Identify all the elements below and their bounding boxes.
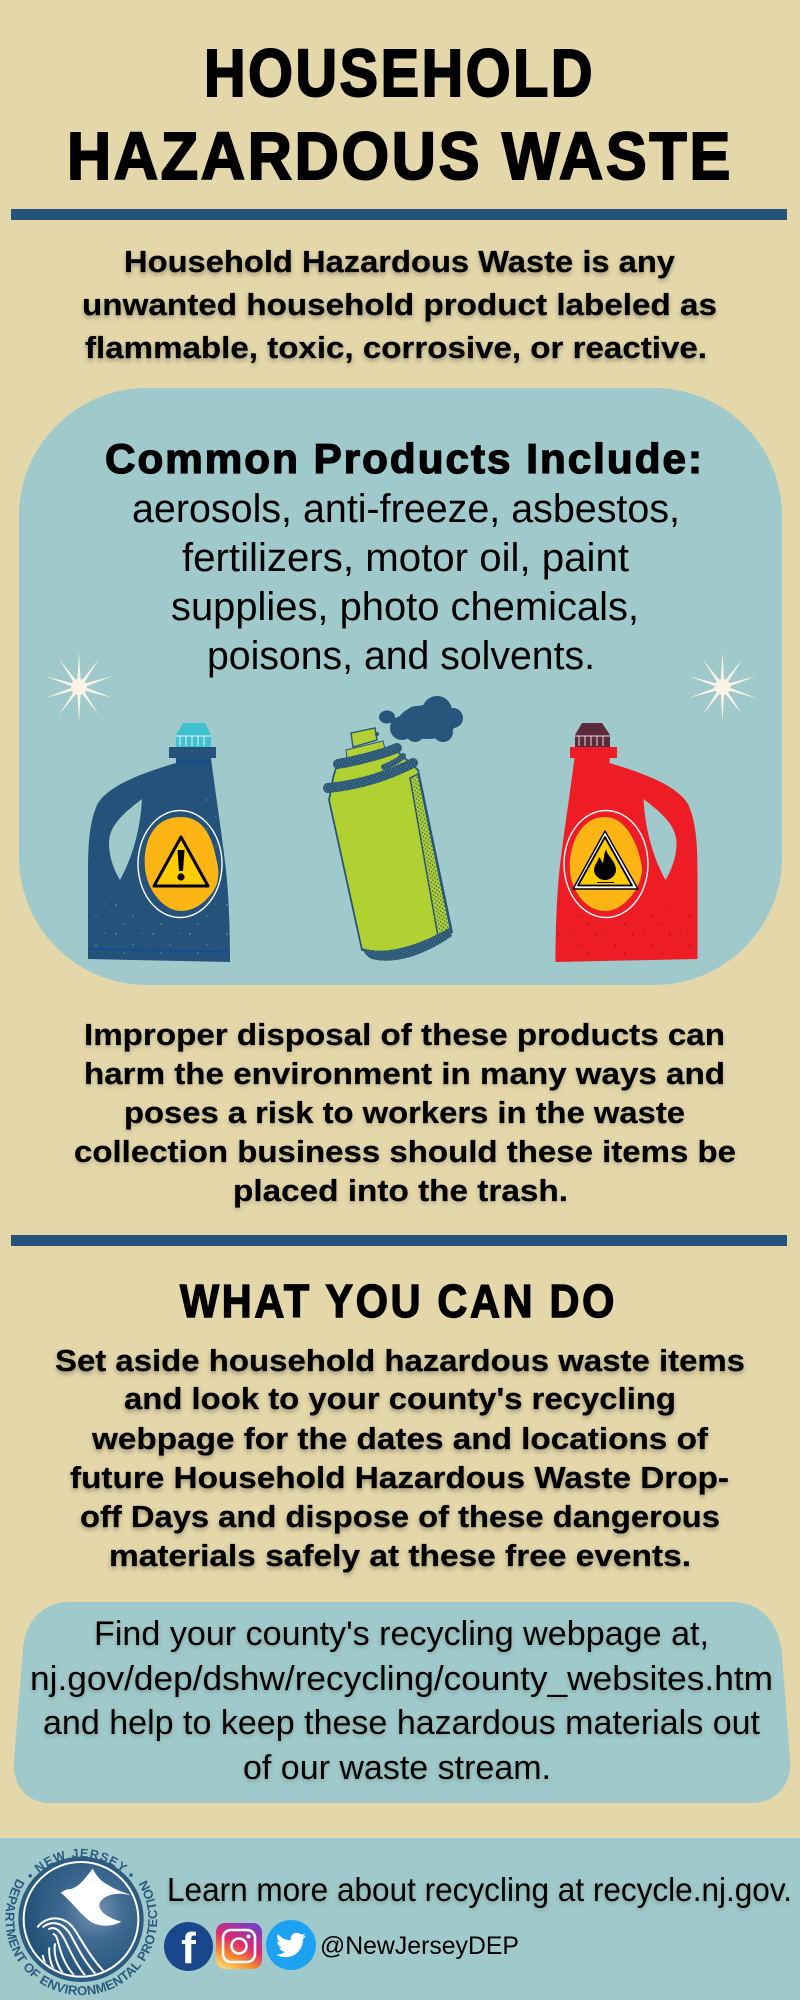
action text: off Days and dispose of these dangerous <box>80 1499 720 1534</box>
panel heading: Common Products Include: <box>105 435 704 482</box>
panel: county webpage <box>14 1602 790 1803</box>
footer band <box>0 1838 800 2000</box>
panel text <box>30 1615 773 1787</box>
icon: right sparkle <box>688 652 756 722</box>
action text: future Household Hazardous Waste Drop- <box>70 1460 729 1495</box>
disposal warning text: harm the environment in many ways and <box>84 1056 725 1091</box>
disposal warning text: placed into the trash. <box>233 1173 568 1208</box>
product list <box>132 487 680 678</box>
icon: twitter <box>266 1920 316 1970</box>
icon: facebook: f <box>181 1924 196 1973</box>
panel text: Find your county's recycling webpage at, <box>94 1615 709 1653</box>
icon: spray cloud <box>379 696 463 742</box>
panel text: and help to keep these hazardous materials out <box>43 1704 761 1742</box>
disposal warning text: Improper disposal of these products can <box>84 1017 725 1052</box>
title: HAZARDOUS WASTE <box>67 119 733 194</box>
icon: NJDEP seal: • NEW JERSEY • <box>28 1848 133 1878</box>
product list: fertilizers, motor oil, paint <box>182 536 629 580</box>
panel text: of our waste stream. <box>243 1749 551 1787</box>
action text: webpage for the dates and locations of <box>91 1421 709 1456</box>
panel background <box>14 1602 790 1803</box>
intro text: flammable, toxic, corrosive, or reactive. <box>85 330 707 365</box>
icon: instagram <box>216 1923 262 1969</box>
action text: and look to your county's recycling <box>124 1381 676 1416</box>
panel background <box>19 388 782 985</box>
product list: poisons, and solvents. <box>207 634 595 678</box>
icon: facebook <box>164 1922 213 1973</box>
section heading: what you can do: WHAT YOU CAN DO <box>180 1275 617 1327</box>
disposal warning text: poses a risk to workers in the waste <box>124 1095 685 1130</box>
panel text: nj.gov/dep/dshw/recycling/county_websites.htm <box>30 1660 773 1698</box>
icon: aerosol can <box>328 728 452 961</box>
action text: Set aside household hazardous waste items <box>55 1343 745 1378</box>
intro text: unwanted household product labeled as <box>82 287 717 322</box>
action text: materials safely at these free events. <box>109 1538 691 1573</box>
social handle: @NewJerseyDEP <box>320 1932 519 1960</box>
icon: red flammable bottle <box>556 723 698 962</box>
action text <box>55 1343 745 1573</box>
product list: aerosols, anti-freeze, asbestos, <box>132 487 680 531</box>
title <box>67 36 733 194</box>
panel: common products <box>19 388 782 985</box>
icon: blue warning bottle <box>88 723 230 962</box>
product list: supplies, photo chemicals, <box>171 585 639 629</box>
icon: left sparkle <box>45 652 113 722</box>
disposal warning text <box>74 1017 736 1208</box>
intro text <box>82 244 717 365</box>
footer background <box>0 1838 800 2000</box>
icon: NJDEP seal: DEPARTMENT OF ENVIRONMENTAL PROTECTION <box>5 1878 158 1996</box>
title: HOUSEHOLD <box>204 36 595 111</box>
intro text: Household Hazardous Waste is any <box>124 244 676 279</box>
disposal warning text: collection business should these items be <box>74 1134 736 1169</box>
